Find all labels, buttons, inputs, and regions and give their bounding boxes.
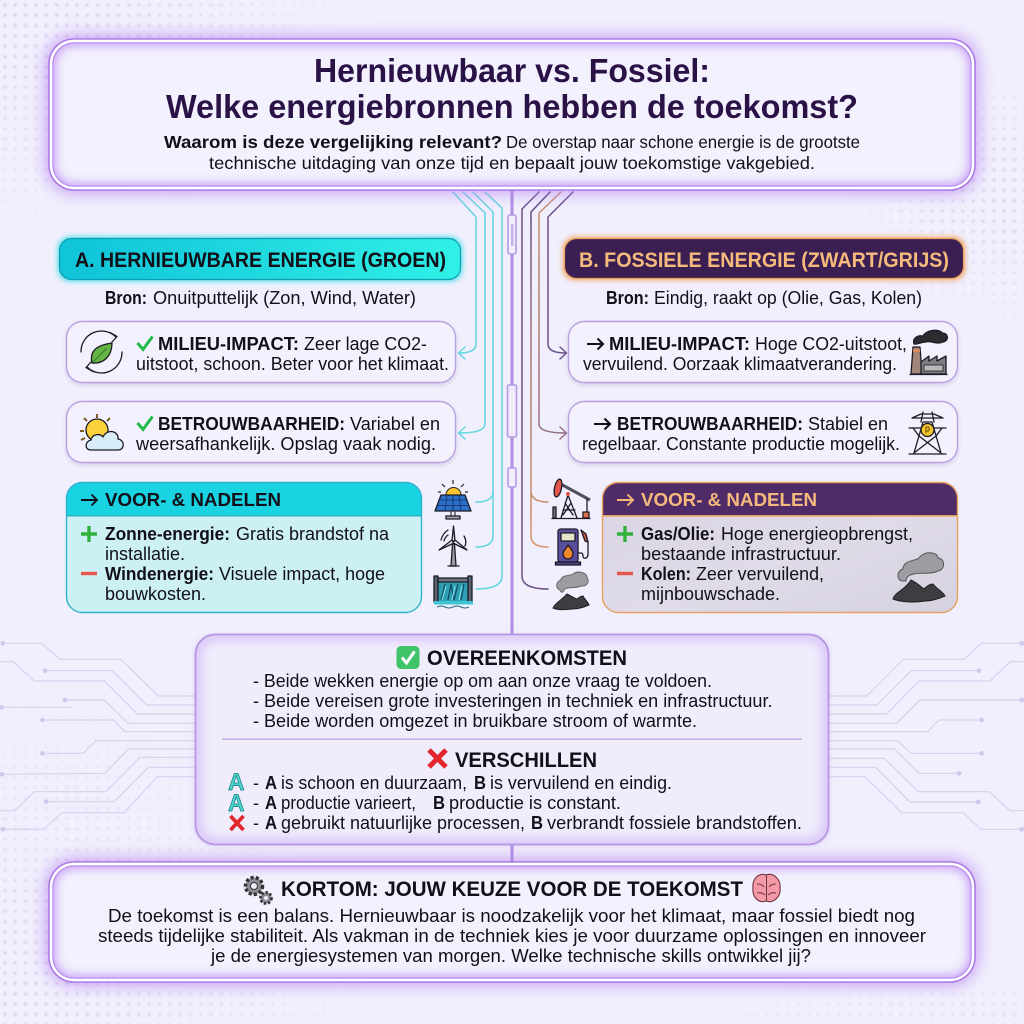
list: differences: productie varieert,: [281, 793, 416, 813]
card: A milieu-impact: Zeer lage CO2-: [304, 334, 427, 354]
card: B betrouwbaarheid: [568, 402, 958, 465]
card: A betrouwbaarheid: [66, 402, 456, 465]
card: A milieu-impact: MILIEU-IMPACT:: [158, 334, 299, 354]
panel: B voor- en nadelen: mijnbouwschade.: [641, 584, 780, 604]
panel: B voor- en nadelen: VOOR- & NADELEN: [641, 489, 817, 510]
source B: Bron:: [606, 288, 649, 308]
title: Welke energiebronnen hebben de toekomst?: [166, 89, 858, 126]
heading: verschillen: VERSCHILLEN: [455, 748, 597, 772]
list: differences: -: [253, 813, 259, 833]
panel: A voor- en nadelen: Windenergie:: [105, 564, 214, 584]
conclusion text: steeds tijdelijke stabiliteit. Als vakman in de techniek kies je voor duurzame oplossingen en innoveer: [98, 926, 926, 946]
panel: B voor- en nadelen: bestaande infrastructuur.: [641, 544, 841, 564]
panel: conclusion: [46, 859, 978, 985]
panel: B voor- en nadelen: Gas/Olie:: [641, 524, 715, 544]
source A: Onuitputtelijk (Zon, Wind, Water): [153, 288, 416, 308]
card: B milieu-impact: vervuilend. Oorzaak klimaatverandering.: [583, 354, 897, 374]
icon: arrow: [81, 494, 97, 506]
list: differences: productie is constant.: [449, 793, 621, 813]
panel: B voor- en nadelen: Zeer vervuilend,: [696, 564, 824, 584]
card: A betrouwbaarheid: BETROUWBAARHEID:: [158, 414, 345, 434]
icon: pump jack: [552, 478, 590, 518]
panel: A voor- en nadelen: Gratis brandstof na: [236, 524, 390, 544]
list: similarities: [253, 671, 772, 731]
central spine connector: [508, 188, 516, 862]
conclusion text: [98, 906, 926, 966]
list: differences: gebruikt natuurlijke processen,: [281, 813, 525, 833]
list: differences: B: [433, 793, 445, 813]
card: A milieu-impact: uitstoot, schoon. Beter voor het klimaat.: [136, 354, 449, 374]
list: similarities: - Beide worden omgezet in bruikbare stroom of warmte.: [253, 711, 697, 731]
title: Hernieuwbaar vs. Fossiel:: [314, 53, 710, 90]
intro text: technische uitdaging van onze tijd en bepaalt jouw toekomstige vakgebied.: [209, 153, 815, 173]
list: differences: is vervuilend en eindig.: [490, 773, 672, 793]
card: B milieu-impact: Hoge CO2-uitstoot,: [755, 334, 907, 354]
list: differences: -: [253, 773, 259, 793]
icon: arrow: [587, 338, 603, 350]
icon: leaf cycle: [81, 331, 122, 373]
icon: power pylon: [909, 412, 946, 454]
panel: A voor- en nadelen: [66, 482, 422, 613]
check mark: [138, 336, 152, 350]
icon: arrow: [594, 418, 610, 430]
panel: A voor- en nadelen: bouwkosten.: [105, 584, 206, 604]
heading B: [562, 236, 966, 281]
list: differences: B: [474, 773, 486, 793]
icon: coal and smoke small: [553, 572, 589, 610]
card: A betrouwbaarheid: Variabel en: [350, 414, 440, 434]
list: differences: A: [228, 790, 244, 817]
list: differences: [228, 769, 802, 833]
icon: plus: [617, 526, 633, 542]
intro text: [164, 132, 860, 173]
intro text: De overstap naar schone energie is de grootste: [506, 132, 860, 152]
circuit lines right: [828, 641, 1024, 832]
panel: A voor- en nadelen: Zonne-energie:: [105, 524, 230, 544]
list: differences: A: [265, 773, 277, 793]
conclusion text: je de energiesystemen van morgen. Welke technische skills ontwikkel jij?: [210, 946, 811, 966]
check mark: [138, 416, 152, 430]
card: B milieu-impact: MILIEU-IMPACT:: [609, 334, 750, 354]
card: A milieu-impact: [66, 322, 456, 385]
panel: A voor- en nadelen: installatie.: [105, 544, 185, 564]
icon: minus: [81, 572, 97, 575]
icon: gears: [246, 878, 272, 904]
icon: sun and cloud: [80, 414, 123, 450]
icon: red cross: [429, 750, 446, 767]
list: differences: -: [253, 793, 259, 813]
panel: B voor- en nadelen: [602, 482, 958, 613]
icon: coal and smoke: [893, 553, 945, 602]
card: B betrouwbaarheid: BETROUWBAARHEID:: [617, 414, 803, 434]
panel: A voor- en nadelen: VOOR- & NADELEN: [105, 489, 281, 510]
heading B: B. FOSSIELE ENERGIE (ZWART/GRIJS): [579, 248, 949, 272]
connector lines: renewable: [453, 192, 502, 589]
icon: plus: [81, 526, 97, 542]
list: differences: A: [265, 813, 277, 833]
source B: Eindig, raakt op (Olie, Gas, Kolen): [654, 288, 922, 308]
icon: minus: [617, 572, 633, 575]
panel: B voor- en nadelen: Hoge energieopbrengst,: [721, 524, 913, 544]
icon: hydro dam: [434, 576, 473, 608]
icon: brain: [753, 874, 780, 902]
icon: arrow: [617, 494, 633, 506]
card: A betrouwbaarheid: weersafhankelijk. Opslag vaak nodig.: [135, 434, 436, 454]
panel: similarities and differences: [194, 634, 830, 846]
panel: header: [46, 36, 978, 193]
conclusion title: KORTOM: JOUW KEUZE VOOR DE TOEKOMST: [281, 878, 743, 901]
list: differences: A: [265, 793, 277, 813]
list: similarities: - Beide vereisen grote investeringen in techniek en infrastructuur.: [253, 691, 772, 711]
intro text: Waarom is deze vergelijking relevant?: [164, 132, 502, 152]
card: B betrouwbaarheid: Stabiel en: [808, 414, 888, 434]
card: B milieu-impact: [568, 322, 958, 385]
title: [166, 53, 858, 126]
panel: A voor- en nadelen: Visuele impact, hoge: [219, 564, 385, 584]
icon: factory: [910, 330, 947, 374]
card: B betrouwbaarheid: regelbaar. Constante productie mogelijk.: [582, 434, 900, 454]
list: differences: A: [228, 769, 244, 796]
list: similarities: - Beide wekken energie op om aan onze vraag te voldoen.: [253, 671, 712, 691]
icon: fuel pump: [556, 529, 588, 565]
circuit lines left: [0, 641, 195, 832]
list: differences: is schoon en duurzaam,: [281, 773, 467, 793]
panel: B voor- en nadelen: Kolen:: [641, 564, 691, 584]
icon: solar panel: [435, 480, 471, 519]
list: differences: verbrandt fossiele brandstoffen.: [547, 813, 802, 833]
heading A: [57, 236, 463, 282]
icon: green check box: [396, 646, 420, 669]
icon: wind turbine: [439, 526, 467, 566]
source A: Bron:: [105, 288, 147, 308]
connector lines: fossil: [522, 192, 573, 589]
list: differences: B: [531, 813, 543, 833]
conclusion text: De toekomst is een balans. Hernieuwbaar is noodzakelijk voor het klimaat, maar fossiel biedt nog: [108, 906, 915, 926]
heading: overeenkomsten: OVEREENKOMSTEN: [427, 646, 627, 670]
heading A: A. HERNIEUWBARE ENERGIE (GROEN): [75, 248, 446, 272]
